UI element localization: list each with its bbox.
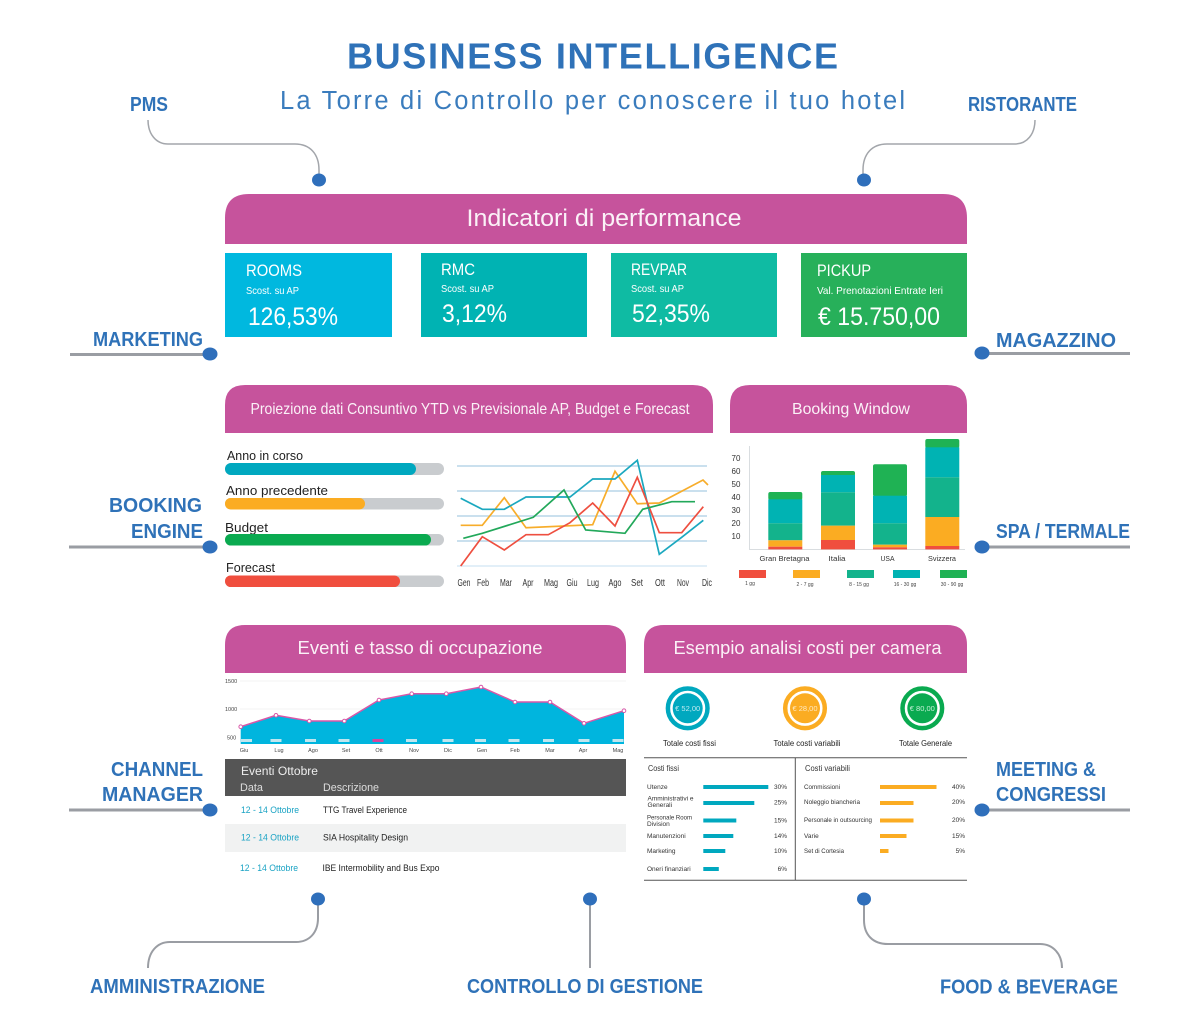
line chart: Ott <box>655 578 665 589</box>
fixed cost bars <box>647 784 787 873</box>
KPI card: pickup: Val. Prenotazioni Entrate Ieri <box>817 285 943 297</box>
area chart: 500 <box>227 736 236 742</box>
heading: costs <box>644 625 967 673</box>
KPI card: RMC: Scost. su AP <box>441 283 494 295</box>
stacked bar chart: 50 <box>732 480 741 489</box>
stacked bar chart: 30 <box>732 506 741 515</box>
source: Marketing <box>70 328 218 360</box>
cost totals: € 80,00 <box>910 704 935 713</box>
legend: 8 - 15 gg <box>849 582 869 588</box>
area chart: Ott <box>375 748 383 754</box>
line chart: Giu <box>566 578 578 589</box>
source: Channel Manager: MANAGER <box>102 783 203 806</box>
line chart: Feb <box>477 578 489 589</box>
stacked bar chart: Italia <box>828 554 846 563</box>
variable cost bars: Varie <box>804 833 819 840</box>
fixed cost bars: 30% <box>774 784 787 791</box>
events table: Data <box>240 782 264 794</box>
KPI card: pickup: PICKUP <box>817 261 871 280</box>
stacked bar chart: 60 <box>732 467 741 476</box>
fixed cost bars: Marketing <box>647 848 676 855</box>
legend: 16 - 30 gg <box>894 582 916 588</box>
line chart: Nov <box>677 578 689 589</box>
variable cost bars: 40% <box>952 784 965 791</box>
variable cost bars: 5% <box>956 848 965 855</box>
source: Ristorante <box>857 93 1077 186</box>
stacked bar chart: 40 <box>732 493 741 502</box>
source: Controllo di Gestione: CONTROLLO DI GESTIONE <box>467 975 703 998</box>
variable cost bars: Commissioni <box>804 784 840 791</box>
line chart: Ago <box>608 578 622 589</box>
KPI card: RMC: RMC <box>441 260 475 279</box>
KPI card: rooms <box>225 253 392 337</box>
progress bars: Anno precedente <box>226 483 328 498</box>
cost totals: Totale costi variabili <box>774 739 841 748</box>
events table: 12 - 14 Ottobre <box>240 863 298 873</box>
legend <box>739 570 967 588</box>
area chart: Gen <box>477 748 487 754</box>
area chart: Dic <box>444 748 452 754</box>
fixed cost bars: Division <box>647 821 670 828</box>
source: PMS <box>130 93 326 186</box>
heading: projection <box>225 385 713 433</box>
KPI card: RevPAR: REVPAR <box>631 260 687 279</box>
fixed cost bars: 15% <box>774 818 787 824</box>
variable cost bars: 20% <box>952 799 965 806</box>
line chart: Lug <box>587 578 599 589</box>
area chart: Set <box>342 748 351 754</box>
fixed cost bars: Amministrativi e <box>648 796 694 802</box>
legend: 1 gg <box>745 581 755 587</box>
events table: 12 - 14 Ottobre <box>241 805 299 815</box>
KPI card: RMC <box>421 253 587 337</box>
events table: Eventi Ottobre <box>241 766 318 778</box>
stacked bar chart: Gran Bretagna <box>760 554 810 563</box>
source: Meeting & Congressi: CONGRESSI <box>996 783 1106 806</box>
heading: booking window: Booking Window <box>792 401 910 418</box>
area chart: Giu <box>240 748 248 754</box>
panel: performance indicators <box>225 194 967 337</box>
fixed cost bars: Utenze <box>647 784 668 791</box>
area chart: Feb <box>510 748 520 754</box>
variable cost bars: Noleggio biancheria <box>804 799 860 806</box>
line chart: Set <box>631 578 643 589</box>
KPI card: rooms: 126,53% <box>248 303 338 331</box>
line chart: Dic <box>702 578 712 589</box>
area chart <box>225 679 626 754</box>
source: Magazzino <box>974 329 1130 360</box>
variable cost bars: Personale in outsourcing <box>804 817 872 824</box>
source: PMS: PMS <box>130 93 168 116</box>
source: SPA / Termale: SPA / TERMALE <box>996 520 1130 543</box>
KPI card: rooms: ROOMS <box>246 261 302 280</box>
source: Marketing: MARKETING <box>93 328 203 351</box>
KPI card: pickup <box>801 253 967 337</box>
source: Amministrazione <box>90 892 325 998</box>
stacked bar chart: 10 <box>732 532 741 541</box>
legend: 2 - 7 gg <box>797 582 814 588</box>
variable cost bars: 20% <box>952 817 965 824</box>
fixed cost bars: Personale Room <box>647 814 692 822</box>
variable cost bars <box>804 784 965 855</box>
KPI card: rooms: Scost. su AP <box>246 285 299 297</box>
fixed cost bars: 25% <box>774 800 787 806</box>
panel: room cost analysis <box>644 625 967 880</box>
progress bars: Forecast <box>226 560 275 575</box>
source: Meeting & Congressi: MEETING & <box>996 758 1096 781</box>
events table <box>225 759 626 873</box>
source: Meeting & Congressi <box>974 758 1130 816</box>
heading: events: Eventi e tasso di occupazione <box>298 638 542 658</box>
KPI card: RevPAR: Scost. su AP <box>631 283 684 295</box>
source: Ristorante: RISTORANTE <box>968 93 1077 116</box>
source: Magazzino: MAGAZZINO <box>996 329 1116 352</box>
KPI card: pickup: € 15.750,00 <box>818 303 940 331</box>
KPI card: RevPAR: 52,35% <box>632 300 710 328</box>
title: BUSINESS INTELLIGENCE <box>347 36 838 76</box>
area chart: Lug <box>274 748 284 754</box>
heading: performance: Indicatori di performance <box>466 205 742 232</box>
source: Amministrazione: AMMINISTRAZIONE <box>90 975 265 998</box>
line chart: Mar <box>500 578 512 589</box>
events table: 12 - 14 Ottobre <box>241 832 299 842</box>
panel: events and occupancy <box>225 625 626 873</box>
fixed cost bars: 6% <box>778 866 787 873</box>
heading: costs: Esempio analisi costi per camera <box>674 638 942 658</box>
area chart: Mar <box>545 748 555 754</box>
subtitle: La Torre di Controllo per conoscere il tuo hotel <box>280 87 905 115</box>
cost tables: Costi fissi <box>648 764 679 773</box>
cost tables: Costi variabili <box>805 764 850 773</box>
panel: projection <box>225 385 713 589</box>
events table: TTG Travel Experience <box>323 805 407 815</box>
line chart: Mag <box>544 578 558 589</box>
cost totals <box>663 688 953 748</box>
line chart: Gen <box>458 578 470 589</box>
cost totals: Totale Generale <box>899 739 953 748</box>
source: Food & Beverage <box>857 892 1118 998</box>
source: Booking Engine: BOOKING <box>109 494 202 517</box>
events table: SIA Hospitality Design <box>323 832 408 842</box>
legend: 30 - 90 gg <box>941 582 963 588</box>
cost tables <box>644 758 967 880</box>
fixed cost bars: Oneri finanziari <box>647 866 691 873</box>
source: Controllo di Gestione <box>467 892 703 998</box>
area chart: 1500 <box>225 679 237 685</box>
cost totals: € 52,00 <box>675 704 700 713</box>
progress bars: Anno in corso <box>227 448 303 463</box>
line chart: Apr <box>522 578 534 589</box>
fixed cost bars: 10% <box>774 848 787 855</box>
events table: IBE Intermobility and Bus Expo <box>322 863 440 873</box>
stacked bar chart: 70 <box>732 454 741 463</box>
line chart <box>457 460 712 589</box>
heading: projection: Proiezione dati Consuntivo YTD vs Previsionale AP, Budget e Forecast <box>250 401 690 418</box>
fixed cost bars: 14% <box>774 833 787 840</box>
events table: Descrizione <box>323 782 379 794</box>
cost totals: Totale costi fissi <box>663 739 716 748</box>
area chart: Nov <box>409 748 419 754</box>
fixed cost bars: Generali <box>648 802 672 809</box>
heading: booking window <box>730 385 967 433</box>
source: Food & Beverage: FOOD & BEVERAGE <box>940 976 1118 998</box>
source: Booking Engine: ENGINE <box>131 520 203 543</box>
variable cost bars: 15% <box>952 833 965 840</box>
KPI card: RMC: 3,12% <box>442 300 507 328</box>
panel: booking window <box>730 385 967 588</box>
KPI card: RevPAR <box>611 253 777 337</box>
stacked bar chart: Svizzera <box>928 554 957 563</box>
area chart: Ago <box>308 748 318 754</box>
source: Channel Manager: CHANNEL <box>111 758 203 781</box>
cost totals: € 28,00 <box>792 704 818 713</box>
stacked bar chart <box>732 439 967 588</box>
source: Channel Manager <box>69 758 218 816</box>
variable cost bars: Set di Cortesia <box>804 848 844 855</box>
stacked bar chart: USA <box>880 554 894 563</box>
progress bars: Budget <box>225 520 268 535</box>
area chart: Mag <box>613 748 623 754</box>
heading: performance <box>225 194 967 244</box>
source: Booking Engine <box>69 494 218 554</box>
fixed cost bars: Manutenzioni <box>647 833 686 840</box>
area chart: 1000 <box>225 707 237 713</box>
source: SPA / Termale <box>974 520 1130 554</box>
stacked bar chart: 20 <box>732 519 741 528</box>
progress bars <box>225 448 444 587</box>
area chart: Apr <box>579 748 587 754</box>
heading: events <box>225 625 626 673</box>
